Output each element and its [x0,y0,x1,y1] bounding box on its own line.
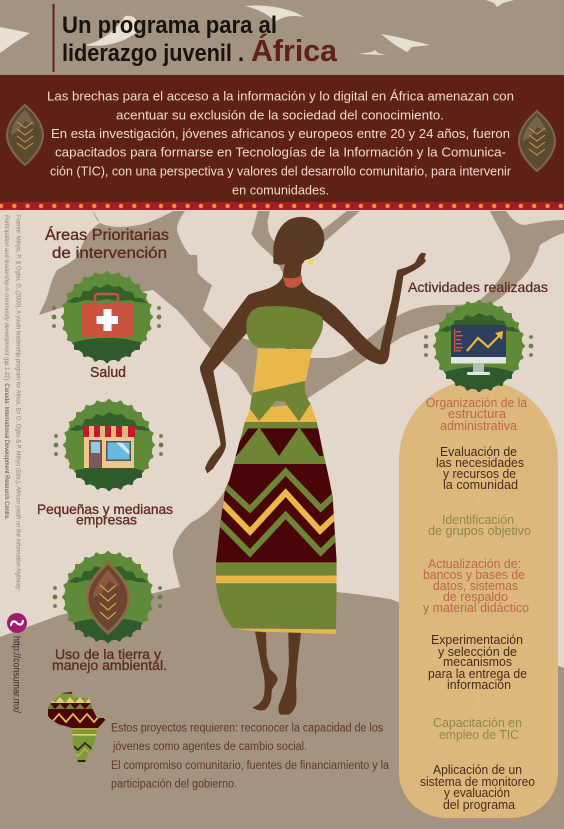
badge: land use [53,550,162,644]
activity: delivery mechanisms: información [447,678,511,692]
icon: left leaf [7,105,43,165]
activity: needs assessment [436,445,524,492]
icon: patterned africa map [48,692,107,762]
closing note: participación del gobierno. [111,778,237,790]
activity: organization: Organización de la [426,396,527,410]
activity: needs assessment: y recursos de [443,467,516,481]
activity: organization: estructura [448,407,506,421]
header band [0,0,564,75]
activity: needs assessment: Evaluación de [440,445,517,459]
heading: priority areas [45,227,169,262]
activity: needs assessment: las necesidades [436,456,524,470]
icon: right leaf [519,111,555,171]
label: land use: manejo ambiental. [52,657,167,673]
intro text [47,88,514,198]
icon: first aid kit [82,294,133,337]
heading: priority areas: Áreas Prioritarias [45,227,169,244]
heading: activities: Actividades realizadas [408,279,548,295]
icon: consumar logo [7,613,27,633]
intro text: ción (TIC), con una perspectiva y valores del desarrollo comunitario, para intervenir [50,164,512,178]
activity: organization: administrativa [440,419,517,433]
closing note [111,722,390,790]
heading: priority areas: de intervención [52,245,167,262]
activity: monitoring: del programa [443,798,515,812]
label: health: Salud [90,365,126,381]
activity: ICT training: Capacitación en [433,716,522,730]
activity: database update [423,557,529,615]
earring [308,259,314,265]
label: small business: empresas [76,512,137,528]
intro text: Las brechas para el acceso a la información y lo digital en África amenazan con [47,88,514,104]
title: liderazgo juvenil . [62,40,244,67]
activity: organization [426,396,527,433]
title rule [52,4,54,72]
activity: monitoring [420,763,535,812]
head and body [200,217,426,473]
closing note: Estos proyectos requieren: reconocer la capacidad de los [111,722,383,734]
illustration: baobab tree and ground [0,211,564,829]
badge: small business [54,398,163,492]
title: Un programa para al [62,12,277,39]
activity: target groups [428,513,531,538]
label: small business [37,501,173,528]
icon: monitor with chart [451,325,506,375]
birds [0,0,514,55]
activity: needs assessment: la comunidad [443,478,518,492]
intro panel [0,75,564,210]
icon: seed leaf [87,563,129,633]
intro text: en comunidades. [232,182,329,198]
label: land use [52,646,167,673]
intro text: capacitados para formarse en Tecnologías de la Información y la Comunica- [55,144,506,160]
source line 1: Fuente: Mihyo, P. & Ogbu, O. (2000). A youth leadership program for Africa. En O. Ogbu & P. Mihyo (Eds.), African youth on the information highway: [14,215,22,591]
badge: activities [424,299,533,393]
activity: monitoring: Aplicación de un [433,763,522,777]
activity: monitoring: sistema de monitoreo [420,775,535,789]
activity: database update: bancos y bases de [423,568,525,582]
activity: ICT training [433,716,522,742]
website url: http://consumar.mx/ [10,636,22,713]
badge: health [52,270,161,364]
activity: delivery mechanisms [428,633,527,692]
illustration: woman in patterned dress [200,217,426,715]
activity: delivery mechanisms: Experimentación [431,633,523,647]
title [62,12,338,68]
necklace [283,275,302,288]
intro text: acentuar su exclusión de la sociedad del conocimiento. [116,108,444,122]
activity: delivery mechanisms: para la entrega de [428,667,527,681]
intro text: En esta investigación, jóvenes africanos y europeos entre 20 y 24 años, fueron [51,126,510,141]
dress [210,306,343,634]
activity: target groups: de grupos objetivo [428,524,531,538]
activity: database update: datos, sistemas [433,579,518,593]
legs [253,632,301,715]
activity: database update: Actualización de: [428,557,521,571]
activity: delivery mechanisms: mecanismos [443,655,512,669]
activity: delivery mechanisms: y selección de [438,645,517,659]
closing note: El compromiso comunitario, fuentes de financiamiento y la [111,760,390,772]
source line 2: Participation and leadership in community development (pp.1-22). Canada: International Development Research Centre. [3,215,10,520]
activity: target groups: Identificación [442,513,514,527]
title: África [251,33,338,68]
source credit [3,215,22,591]
activity: monitoring: y evaluación [444,786,510,800]
activity: database update: de respaldo [443,590,508,604]
panel: activities list [399,380,558,818]
dotted strip [0,202,564,210]
closing note: jóvenes como agentes de cambio social. [112,741,307,753]
activity: database update: y material didáctico [423,601,529,615]
icon: shop [83,426,135,468]
label: small business: Pequeñas y medianas [37,501,173,517]
activity: ICT training: empleo de TIC [439,728,519,742]
label: land use: Uso de la tierra y [55,646,161,662]
